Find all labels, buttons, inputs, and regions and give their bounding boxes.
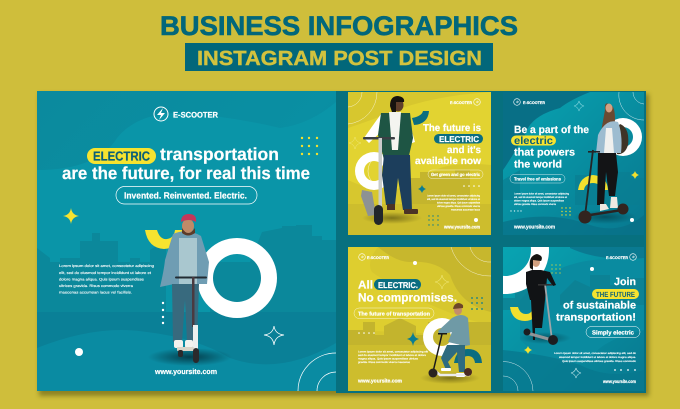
dot grid bbox=[561, 207, 571, 216]
skyline bbox=[37, 225, 336, 312]
website: www.yoursite.com bbox=[513, 224, 555, 230]
headline: ELECTRIC bbox=[439, 134, 479, 144]
logo: E-SCOOTER bbox=[606, 256, 628, 260]
headline: The future is bbox=[423, 123, 481, 134]
white dot bbox=[413, 261, 417, 265]
headline: of sustainable bbox=[563, 300, 636, 312]
body copy: Lorem ipsum dolor sit amet, consectetur adipiscing bbox=[59, 264, 154, 268]
body copy: Lorem ipsum dolor sit amet, consectetur adipiscing bbox=[514, 192, 570, 196]
icon: outline sparkle bbox=[349, 137, 361, 149]
headline bbox=[62, 147, 310, 182]
tagline pill bbox=[586, 326, 640, 338]
headline: and it's bbox=[447, 145, 481, 156]
body copy: dolore magna aliqua. Quis ipsum suspendisse bbox=[514, 200, 565, 202]
tagline pill: Travel free of emissions bbox=[514, 176, 561, 182]
logo: E-SCOOTER bbox=[450, 101, 472, 105]
logo: E-SCOOTER bbox=[367, 256, 389, 260]
icon: teal sparkle bbox=[418, 185, 426, 193]
tagline pill bbox=[354, 308, 434, 318]
body copy: ultrices gravida. Risus commodo viverra bbox=[514, 203, 557, 206]
logo: e-scooter bbox=[154, 107, 218, 121]
headline: the world bbox=[514, 158, 562, 170]
headline: THE FUTURE bbox=[596, 290, 635, 299]
skyline bbox=[503, 275, 644, 310]
white dot bbox=[590, 267, 594, 271]
website: www.yoursite.com bbox=[154, 367, 217, 376]
panel: all electric no compromises post bbox=[348, 247, 491, 391]
panel: large electric transportation post bbox=[37, 91, 336, 392]
icon: outline sparkle bbox=[571, 368, 581, 378]
corner arcs bbox=[298, 353, 336, 391]
headline: No compromises. bbox=[358, 290, 457, 304]
icon: yellow sparkle bbox=[524, 346, 532, 354]
body copy: elit, sed do eiusmod tempor incididunt ut labore et bbox=[514, 196, 567, 199]
body copy bbox=[358, 350, 428, 364]
headline: ELECTRIC. bbox=[378, 280, 418, 290]
man on scooter bbox=[420, 303, 480, 384]
body copy: elit, sed do eiusmod tempor incididunt ut labore et bbox=[427, 198, 480, 201]
logo: E-SCOOTER bbox=[523, 101, 545, 105]
body copy: eiusmod tempor incididunt ut labore et dolore magna aliqua. bbox=[559, 356, 636, 359]
skyline bbox=[405, 170, 470, 204]
dots bbox=[510, 210, 522, 212]
dot grid bbox=[428, 215, 439, 226]
body copy: gravida. Risus commodo viverra maecenas bbox=[358, 361, 411, 364]
white dot bbox=[630, 218, 634, 222]
title: BUSINESS INFOGRAPHICS bbox=[160, 11, 518, 41]
outline circle bbox=[368, 161, 398, 188]
man with scooter bbox=[361, 96, 422, 225]
icon: outline sparkle bbox=[574, 101, 584, 111]
headline: transportation! bbox=[556, 312, 636, 324]
body copy: ultrices gravida. Risus commodo viverra bbox=[437, 205, 481, 208]
corner arcs bbox=[503, 362, 533, 391]
dots bbox=[358, 332, 375, 334]
subtitle banner: INSTAGRAM POST DESIGN bbox=[197, 47, 482, 70]
corner arcs bbox=[451, 247, 491, 276]
body copy: maecenas accumsan lacus vel facilisis. bbox=[59, 290, 132, 294]
woman with scooter bbox=[573, 103, 637, 224]
icon: yellow sparkle bbox=[631, 171, 639, 179]
body copy: Lorem ipsum dolor sit amet, consectetur adipiscing elit bbox=[358, 350, 428, 354]
body copy: sed do eiusmod tempor incididunt ut labore et dolore bbox=[358, 354, 427, 357]
teal arc bbox=[412, 111, 429, 125]
panel: join the future post bbox=[461, 206, 644, 391]
white dot bbox=[474, 218, 478, 222]
panel: the future is electric post bbox=[348, 92, 491, 235]
body copy bbox=[59, 264, 154, 294]
icon: outline sparkle bbox=[435, 275, 449, 289]
skyline bbox=[503, 170, 589, 200]
headline: transportation bbox=[160, 144, 279, 164]
dots column bbox=[162, 302, 164, 324]
white ring bbox=[614, 118, 642, 156]
body copy: Lorem ipsum dolor sit amet, consectetur adipiscing elit, sed do bbox=[554, 352, 637, 355]
dot grid bbox=[471, 297, 483, 310]
headline bbox=[556, 276, 639, 324]
body copy: maecenas accumsan lacus bbox=[451, 208, 481, 212]
body copy bbox=[554, 352, 637, 363]
dot grid bbox=[301, 137, 318, 155]
person on scooter bbox=[152, 214, 228, 365]
tagline pill bbox=[116, 186, 257, 204]
headline: Be a part of the bbox=[514, 124, 589, 136]
body copy: Lorem ipsum dolor sit amet, consectetur adipiscing bbox=[427, 194, 481, 198]
body copy: Quis ipsum suspendisse ultrices gravida. Risus commodo bbox=[562, 360, 637, 363]
website: www.yoursite.com bbox=[602, 379, 636, 385]
body copy: magna aliqua. Quis ipsum suspendisse ultrices bbox=[358, 358, 419, 360]
yellow half ring bbox=[510, 307, 538, 321]
white ring bbox=[461, 206, 549, 294]
body copy: dolore magna aliqua. Quis ipsum suspendisse bbox=[437, 202, 481, 204]
yellow arch bbox=[578, 175, 608, 190]
backing panel bbox=[336, 91, 646, 393]
icon: teal sparkle bbox=[407, 332, 419, 346]
headline bbox=[415, 123, 483, 167]
headline: are the future, for real this time bbox=[62, 163, 310, 183]
body copy: dolore magna aliqua. Quis ipsum suspendisse bbox=[59, 278, 144, 282]
backing shadow bbox=[39, 94, 649, 396]
logo bbox=[450, 99, 480, 105]
tagline pill bbox=[428, 170, 483, 178]
woman with scooter bbox=[519, 254, 571, 345]
panel: be a part of the electric post bbox=[503, 92, 644, 235]
body copy: ultrices gravida. Risus commodo viverra bbox=[59, 284, 133, 288]
white ring bbox=[355, 152, 384, 190]
yellow half ring bbox=[145, 230, 182, 249]
headline: electric bbox=[514, 135, 553, 147]
teal arch bbox=[454, 349, 482, 363]
headline: Join bbox=[614, 276, 636, 288]
dots bbox=[614, 369, 636, 371]
headline bbox=[511, 124, 589, 170]
body copy bbox=[514, 192, 570, 206]
dots bbox=[463, 185, 480, 187]
headline: that powers bbox=[514, 146, 575, 158]
corner arcs bbox=[619, 92, 644, 120]
logo: e-scooter: E-SCOOTER bbox=[173, 110, 218, 120]
tagline pill: Invented. Reinvented. Electric. bbox=[124, 190, 247, 200]
tagline pill: The future of transportation bbox=[358, 312, 431, 318]
tagline pill: Get green and go electric bbox=[431, 172, 480, 177]
website: www.yoursite.com bbox=[443, 224, 480, 230]
logo bbox=[606, 254, 636, 260]
body copy: elit, sed do eiusmod tempor incididunt ut labore et bbox=[59, 271, 151, 275]
logo bbox=[359, 254, 389, 260]
white ring bbox=[423, 318, 461, 356]
white ring bbox=[197, 238, 277, 318]
white dot bbox=[75, 348, 83, 356]
tagline pill: Simply electric bbox=[592, 330, 635, 336]
icon: yellow sparkle bbox=[63, 208, 79, 224]
website: www.yoursite.com bbox=[357, 378, 402, 384]
headline bbox=[358, 279, 457, 304]
corner arcs bbox=[348, 92, 377, 124]
headline: ELECTRIC bbox=[93, 148, 151, 164]
tagline pill bbox=[510, 174, 565, 183]
headline: All bbox=[358, 280, 373, 292]
body copy bbox=[427, 194, 481, 212]
headline: available now bbox=[415, 156, 481, 167]
dot grid bbox=[551, 264, 561, 274]
skyline bbox=[348, 318, 491, 345]
icon: outline sparkle bbox=[264, 326, 284, 345]
logo bbox=[514, 99, 545, 105]
